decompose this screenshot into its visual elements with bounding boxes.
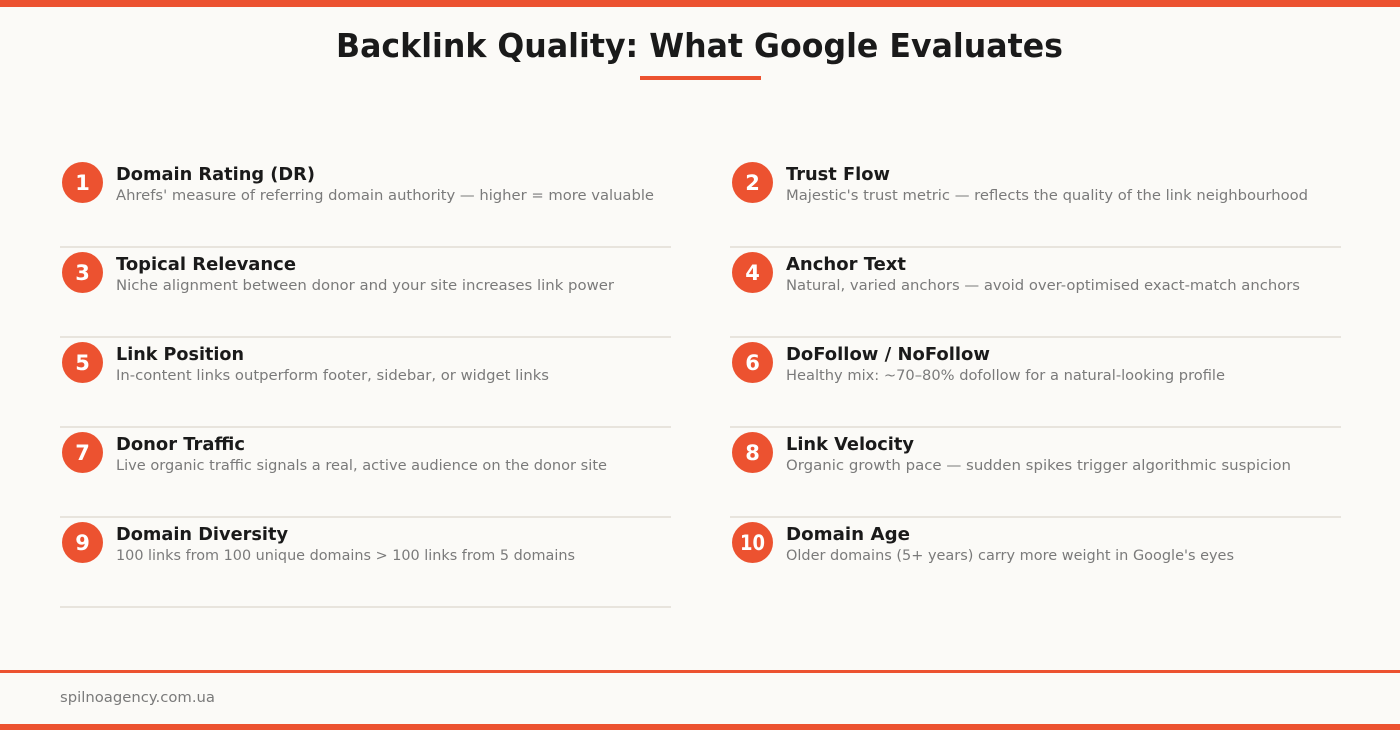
item 8: Link Velocity: [732, 432, 1291, 474]
item 1: Domain Rating: 1: [75, 171, 90, 195]
footer text: spilnoagency.com.ua: [60, 690, 215, 706]
item 10: Domain Age: Older domains (5+ years) carry more weight in Google's eyes: [786, 548, 1234, 564]
item 6: DoFollow / NoFollow: 6: [745, 351, 760, 375]
item 6: DoFollow / NoFollow: [732, 342, 1225, 384]
item 4: Anchor Text: Natural, varied anchors — avoid over-optimised exact-match anchors: [786, 278, 1300, 294]
item 8: Link Velocity: 8: [745, 441, 760, 465]
item 3: Topical Relevance: 3: [75, 261, 90, 285]
item 7: Donor Traffic: [62, 432, 607, 474]
item 7: Donor Traffic: Live organic traffic signals a real, active audience on the donor site: [116, 458, 607, 474]
item 5: Link Position: Link Position: [116, 345, 244, 365]
item 2: Trust Flow: [732, 162, 1308, 204]
top accent bar: [0, 0, 1400, 7]
title: Backlink Quality: What Google Evaluates: [336, 26, 1063, 65]
title underline: [640, 76, 761, 80]
item 9: Domain Diversity: 100 links from 100 unique domains > 100 links from 5 domains: [116, 548, 575, 564]
item 1: Domain Rating: [62, 162, 654, 204]
item 10: Domain Age: [732, 522, 1234, 564]
item 6: DoFollow / NoFollow: DoFollow / NoFollow: [786, 345, 990, 365]
item 4: Anchor Text: [732, 252, 1300, 294]
footer rule: [0, 670, 1400, 673]
item 4: Anchor Text: Anchor Text: [786, 255, 906, 275]
item 9: Domain Diversity: Domain Diversity: [116, 525, 289, 545]
item 2: Trust Flow: 2: [745, 171, 760, 195]
item 2: Trust Flow: Trust Flow: [786, 165, 890, 185]
item 8: Link Velocity: Link Velocity: [786, 435, 915, 455]
item 9: Domain Diversity: 9: [75, 531, 90, 555]
item 3: Topical Relevance: Niche alignment between donor and your site increases link power: [116, 278, 614, 294]
item 9: Domain Diversity: [62, 522, 575, 564]
item 1: Domain Rating: Ahrefs' measure of referring domain authority — higher = more valuable: [116, 188, 654, 204]
item 3: Topical Relevance: [62, 252, 614, 294]
bottom accent bar: [0, 724, 1400, 730]
item 6: DoFollow / NoFollow: Healthy mix: ~70–80% dofollow for a natural-looking profile: [786, 368, 1225, 384]
item 1: Domain Rating: Domain Rating (DR): [116, 165, 315, 185]
item 10: Domain Age: 10: [740, 531, 765, 555]
item 5: Link Position: In-content links outperform footer, sidebar, or widget links: [116, 368, 549, 384]
item 3: Topical Relevance: Topical Relevance: [116, 255, 296, 275]
item 4: Anchor Text: 4: [745, 261, 760, 285]
item 8: Link Velocity: Organic growth pace — sudden spikes trigger algorithmic suspicion: [786, 458, 1291, 474]
item 5: Link Position: [62, 342, 549, 384]
item 10: Domain Age: Domain Age: [786, 525, 910, 545]
item 2: Trust Flow: Majestic's trust metric — reflects the quality of the link neighbourhood: [786, 188, 1308, 204]
item 7: Donor Traffic: Donor Traffic: [116, 435, 245, 455]
item 5: Link Position: 5: [75, 351, 90, 375]
item 7: Donor Traffic: 7: [75, 441, 90, 465]
